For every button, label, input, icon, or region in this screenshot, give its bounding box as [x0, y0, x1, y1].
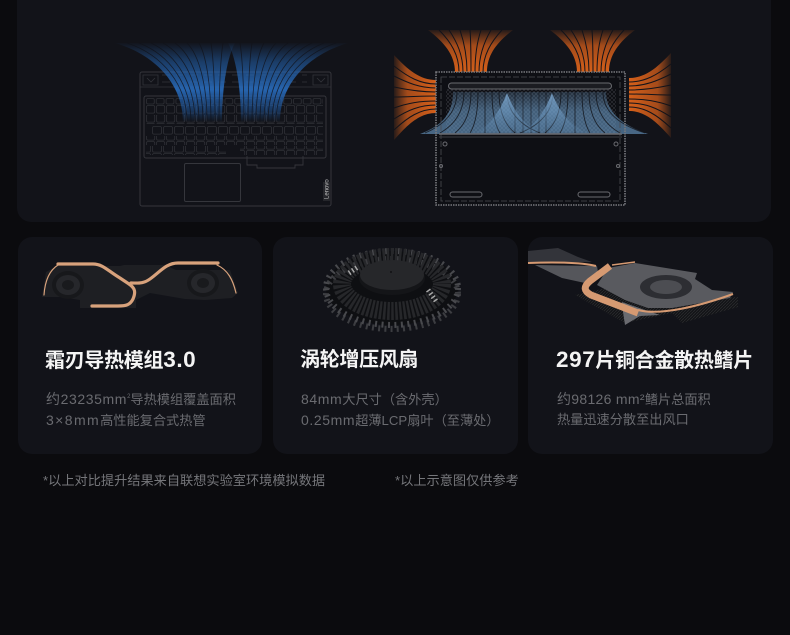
impeller base [326, 251, 458, 325]
fan intake [640, 275, 692, 299]
image: copper alloy fins module [528, 248, 738, 325]
text: fins details [557, 391, 711, 427]
orange exhaust: top-left [428, 30, 513, 72]
vents and feet [439, 83, 622, 197]
blue airflow: left fan [115, 43, 235, 122]
text: turbo fan details: 0.25mm超薄LCP扇叶（至薄处） [301, 412, 500, 428]
main plate [597, 263, 733, 308]
text: turbo fan details: 84mm大尺寸（含外壳） [301, 391, 448, 407]
image: turbo fan impeller [326, 251, 458, 329]
hub [359, 260, 425, 295]
heading: turbo fan: 涡轮增压风扇 [300, 349, 418, 371]
left fan [52, 271, 84, 299]
text: thermal module details [46, 391, 236, 428]
panel: fins card [528, 237, 773, 454]
text: thermal module details: 约23235mm2导热模组覆盖面积 [46, 391, 236, 407]
image: thermal module with copper heat pipes [42, 263, 238, 308]
base interior [436, 72, 625, 205]
light blue peaks [478, 93, 584, 132]
text: fins details: 热量迅速分散至出风口 [557, 412, 689, 427]
text: turbo fan details [301, 391, 500, 428]
top left plate [528, 248, 592, 262]
heading: thermal module: 霜刃导热模组3.0 [45, 347, 196, 372]
panel: thermal module card [18, 237, 262, 454]
copper band [528, 262, 733, 313]
mesh intake area [446, 89, 616, 133]
outer blades [326, 251, 458, 325]
fins [575, 285, 738, 323]
hinge vents [140, 75, 331, 87]
inner blades [342, 257, 442, 311]
touchpad [184, 164, 240, 202]
orange exhaust: top-right [550, 30, 635, 72]
right fan [187, 269, 219, 297]
base outline [436, 72, 625, 205]
panel: turbo fan card [273, 237, 518, 454]
left plate [535, 265, 598, 283]
illustration: laptop top view with blue intake airflow [115, 43, 348, 206]
orange exhaust: right [629, 53, 671, 138]
orange exhaust: left [394, 55, 436, 140]
laptop outline [140, 72, 331, 206]
logo: Lenovo: Lenovo [324, 179, 330, 199]
footnote: illustration only: *以上示意图仅供参考 [395, 473, 519, 488]
text: thermal module details: 3×8mm高性能复合式热管 [46, 412, 206, 428]
copper pipes [44, 263, 236, 306]
heading: fins: 297片铜合金散热鳍片 [556, 347, 753, 372]
lower blade rim [326, 259, 458, 329]
blue airflow: right fan [228, 43, 348, 122]
light blue airflow [420, 92, 648, 134]
dark base plate [42, 265, 238, 308]
blade highlights [349, 267, 436, 301]
keyboard [144, 96, 326, 168]
illustration: laptop bottom view with orange exhaust airflow [394, 30, 671, 205]
footnote: lab data: *以上对比提升结果来自联想实验室环境模拟数据 [43, 473, 325, 488]
text: fins details: 约98126 mm²鳍片总面积 [557, 391, 711, 407]
support bracket [622, 302, 660, 325]
panel: top airflow comparison [17, 0, 771, 222]
